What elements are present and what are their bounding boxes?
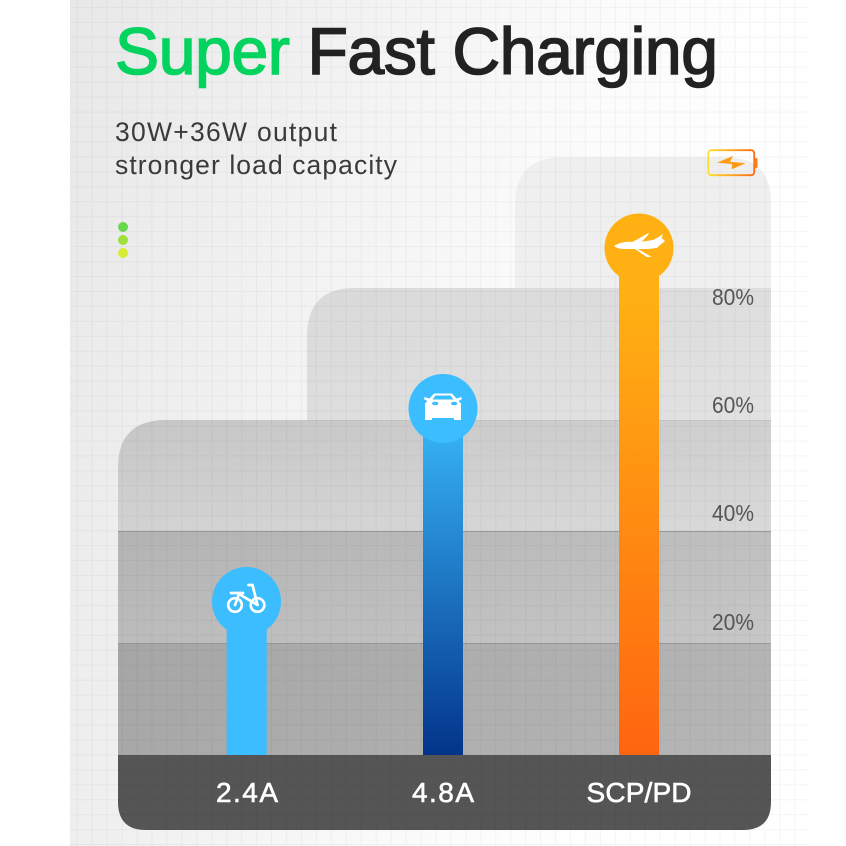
footer labels: 4.8A [412, 777, 474, 808]
step: third level [118, 420, 771, 531]
axis labels: 80% [712, 284, 754, 310]
subtitle: stronger load capacity [115, 150, 398, 180]
axis labels: 60% [712, 392, 754, 418]
axis labels [712, 284, 754, 635]
footer labels [216, 777, 692, 808]
subtitle [115, 117, 398, 180]
band: 0 to 20 percent [118, 643, 771, 755]
bar: 4.8A car [408, 374, 478, 755]
bar: SCP/PD plane [604, 214, 674, 755]
icon: bicycle [228, 585, 264, 612]
subtitle: 30W+36W output [115, 117, 338, 147]
icon: car [424, 394, 462, 420]
band: 20 to 40 percent [118, 531, 771, 643]
step: top level [515, 157, 771, 288]
stepped chart area [118, 157, 771, 755]
footer labels: 2.4A [216, 777, 278, 808]
bar: 2.4A bike [212, 567, 281, 755]
step: second level [307, 288, 771, 420]
title: Super Fast Charging [115, 14, 718, 88]
axis labels: 20% [712, 609, 754, 635]
icon: battery charging [708, 150, 758, 175]
icon: plane [614, 233, 665, 257]
axis labels: 40% [712, 500, 754, 526]
decorative status dots [118, 222, 128, 258]
footer labels: SCP/PD [586, 777, 692, 808]
footer bar [118, 755, 771, 830]
